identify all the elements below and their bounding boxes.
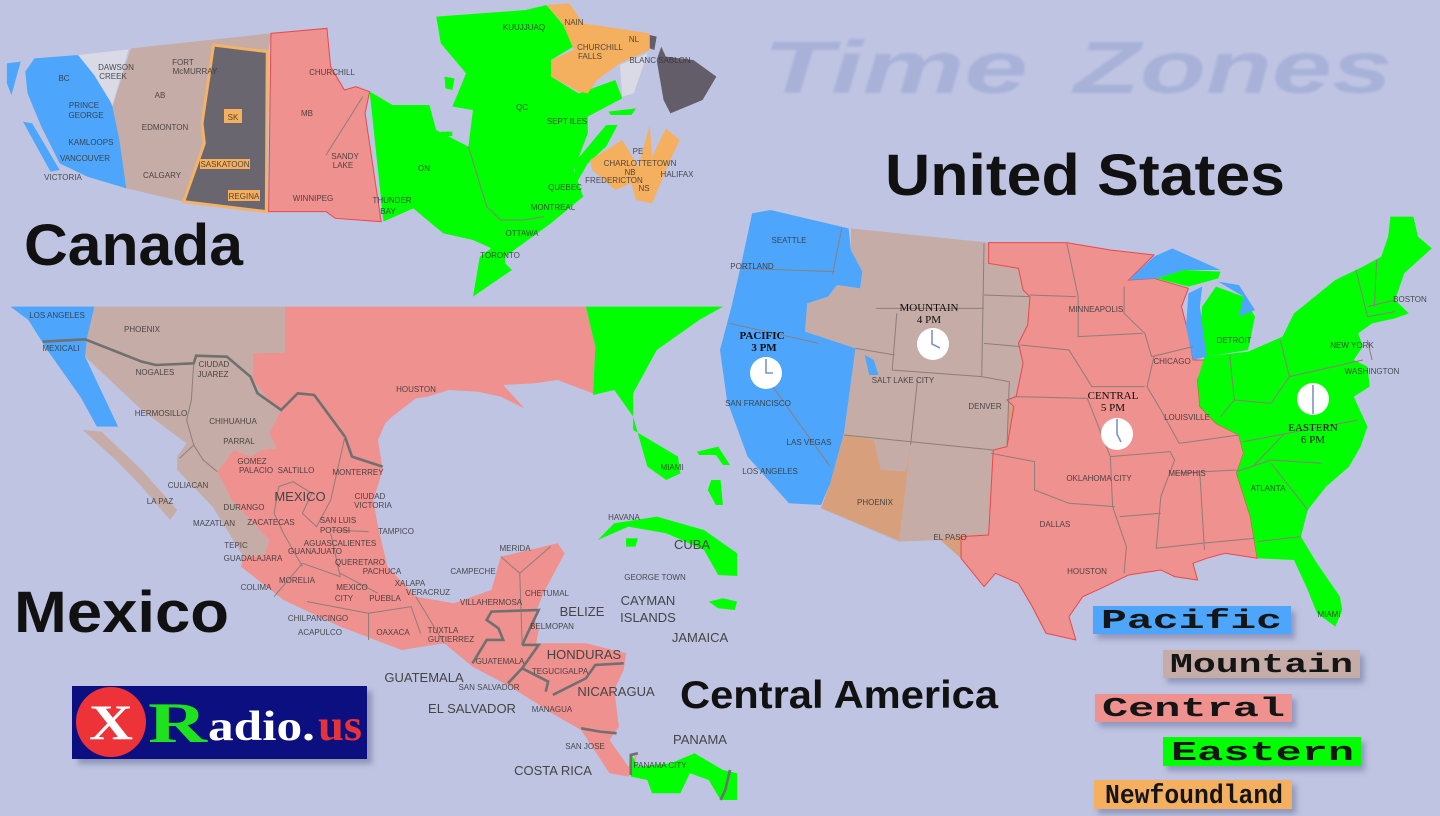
Canada city labels: PRINCE (69, 101, 99, 110)
Canada city labels: THUNDER (372, 196, 412, 205)
United States city and zone labels: LOUISVILLE (1164, 413, 1210, 422)
Mexico city labels: GUATEMALA (384, 670, 464, 685)
Canada city labels: LAKE (333, 161, 353, 170)
Canada city labels: SANDY (331, 152, 359, 161)
United States city and zone labels: SAN FRANCISCO (725, 399, 791, 408)
Mexico city labels: COLIMA (241, 583, 272, 592)
Mexico city labels: MEXICALI (42, 344, 80, 353)
logo: XRadio.us: adio. (208, 704, 315, 750)
Canada city labels: REGINA (229, 192, 260, 201)
Mexico city labels: CAYMAN (621, 593, 675, 608)
Canada city labels: CHURCHILL (577, 43, 623, 52)
Mexico city labels: MEXICO (336, 583, 368, 592)
Mexico city labels: AGUASCALIENTES (304, 539, 376, 548)
Mexico city labels: SAN LUIS (320, 516, 356, 525)
United States city and zone labels: BOSTON (1393, 295, 1427, 304)
United States city and zone labels: MOUNTAIN (899, 302, 959, 314)
Mexico city labels: GUATEMALA (476, 657, 525, 666)
icon: Eastern clock 6 PM (1297, 383, 1329, 415)
Mexico city labels: GUANAJUATO (288, 547, 342, 556)
Mexico city labels: PHOENIX (124, 325, 161, 334)
Mexico city labels: TEPIC (224, 541, 248, 550)
Mexico city labels: SALTILLO (278, 466, 314, 475)
Mexico city labels: CHILPANCINGO (288, 614, 348, 623)
Mexico city labels: VICTORIA (354, 501, 392, 510)
icon: Mountain clock 4 PM (917, 328, 949, 360)
Canada city labels: EDMONTON (142, 123, 188, 132)
Mexico city labels: ACAPULCO (298, 628, 342, 637)
Mexico city labels: JAMAICA (672, 630, 728, 645)
Canada city labels: KAMLOOPS (69, 138, 113, 147)
Mexico city labels: XALAPA (395, 579, 426, 588)
Canada city labels (44, 18, 694, 260)
Mexico city labels: POTOSI (320, 526, 350, 535)
United States city and zone labels: CHICAGO (1153, 357, 1191, 366)
United States city and zone labels: PORTLAND (730, 262, 774, 271)
panel: Canada map (7, 3, 716, 297)
Mexico city labels: MONTERREY (332, 468, 384, 477)
Canada city labels: FORT (172, 58, 194, 67)
Mexico city labels: MEXICO (274, 489, 326, 504)
United States time zone regions (720, 210, 1432, 640)
Canada city labels: BLANC SABLON (629, 56, 691, 65)
Mexico city labels: HAVANA (608, 513, 641, 522)
Canada city labels: HALIFAX (661, 170, 694, 179)
Mexico city labels: CHETUMAL (525, 589, 570, 598)
legend item: Pacific (1093, 606, 1295, 639)
Mexico city labels: JUAREZ (197, 370, 229, 379)
legend item: Eastern: Eastern (1171, 739, 1354, 769)
Mexico city labels: TAMPICO (378, 527, 414, 536)
Mexico city labels: PACHUCA (363, 567, 402, 576)
Canada city labels: TORONTO (480, 251, 520, 260)
logo: XRadio.us: R (148, 692, 208, 755)
Canada city labels: WINNIPEG (293, 194, 333, 203)
Mexico city labels: LOS ANGELES (29, 311, 85, 320)
Mexico city labels: CULIACAN (168, 481, 208, 490)
Canada city labels: KUUJJUAQ (503, 23, 545, 32)
United States city and zone labels: MIAMI (1317, 610, 1341, 619)
Mexico city labels: SAN JOSE (565, 742, 605, 751)
heading: Canada: Canada (24, 213, 244, 278)
Canada city labels: OTTAWA (505, 229, 539, 238)
Canada city labels: FREDERICTON (585, 176, 643, 185)
Mexico city labels: DURANGO (224, 503, 264, 512)
Canada city labels: PE (633, 147, 643, 156)
Mexico city labels: HOUSTON (396, 385, 436, 394)
United States city and zone labels: MINNEAPOLIS (1069, 305, 1123, 314)
Canada city labels: BAY (380, 207, 396, 216)
Canada city labels: CHURCHILL (309, 68, 355, 77)
United States city and zone labels (725, 236, 1427, 619)
Canada city labels: GEORGE (68, 111, 104, 120)
United States city and zone labels: DALLAS (1040, 520, 1070, 529)
United States city and zone labels: LAS VEGAS (787, 438, 831, 447)
Mexico city labels: BELIZE (560, 604, 605, 619)
icon: Central clock 5 PM (1101, 418, 1133, 450)
legend: time zone colours (1093, 606, 1365, 814)
Mexico city labels: CIUDAD (199, 360, 230, 369)
legend item: Mountain: Mountain (1170, 651, 1353, 681)
Mexico city labels: PUEBLA (369, 594, 401, 603)
legend item: Pacific: Pacific (1101, 607, 1282, 637)
heading: United States: United States (885, 143, 1285, 208)
Mexico city labels: COSTA RICA (514, 763, 592, 778)
logo: XRadio.us (72, 686, 372, 764)
United States city and zone labels: EASTERN (1288, 422, 1338, 434)
Mexico city labels (29, 311, 728, 778)
Mexico city labels: SAN SALVADOR (458, 683, 520, 692)
Mexico city labels: EL SALVADOR (428, 701, 516, 716)
legend item: Central (1095, 694, 1296, 727)
panel: United States map (720, 210, 1432, 640)
Mexico city labels: PALACIO (239, 466, 273, 475)
Canada city labels: FALLS (578, 52, 602, 61)
Mexico city labels: VILLAHERMOSA (460, 598, 523, 607)
Canada city labels: SEPT ILES (547, 117, 587, 126)
Mexico city labels: PANAMA (673, 732, 727, 747)
Canada city labels: McMURRAY (173, 67, 218, 76)
United States city and zone labels: SEATTLE (772, 236, 806, 245)
Mexico and Central America regions (10, 307, 737, 800)
Canada city labels: QC (516, 103, 528, 112)
Mexico city labels: QUERETARO (335, 558, 385, 567)
Mexico city labels: NOGALES (136, 368, 174, 377)
United States city and zone labels: PHOENIX (857, 498, 894, 507)
United States city and zone labels: 4 PM (917, 314, 941, 326)
panel: Mexico and Central America map (10, 307, 737, 800)
Mexico city labels: MERIDA (499, 544, 531, 553)
Mexico city labels: TUXTLA (428, 626, 459, 635)
Mexico city labels: GOMEZ (237, 457, 267, 466)
Mexico city labels: MAZATLAN (193, 519, 235, 528)
United States city and zone labels: 5 PM (1101, 402, 1125, 414)
Canada city labels: ON (418, 164, 430, 173)
Mexico city labels: HERMOSILLO (135, 409, 187, 418)
Mexico city labels: CAMPECHE (450, 567, 496, 576)
title: Time Zones: Zones (1071, 26, 1392, 109)
United States city and zone labels: MEMPHIS (1168, 469, 1206, 478)
Mexico city labels: ISLANDS (620, 610, 676, 625)
legend item: Mountain (1163, 650, 1364, 683)
United States city and zone labels: NEW YORK (1330, 341, 1374, 350)
United States city and zone labels: PACIFIC (739, 330, 785, 342)
Mexico city labels: CIUDAD (355, 492, 386, 501)
logo: XRadio.us: us (318, 701, 362, 750)
United States city and zone labels: DENVER (968, 402, 1002, 411)
United States city and zone labels: OKLAHOMA CITY (1066, 474, 1132, 483)
United States city and zone labels: ATLANTA (1251, 484, 1286, 493)
United States city and zone labels: DETROIT (1216, 336, 1252, 345)
title: Time Zones: Time (763, 26, 1028, 109)
Canada city labels: VANCOUVER (60, 154, 110, 163)
Mexico city labels: OAXACA (376, 628, 410, 637)
Canada city labels: NL (629, 35, 640, 44)
United States city and zone labels: 3 PM (751, 342, 777, 354)
Canada city labels: CREEK (99, 72, 127, 81)
Canada city labels: SASKATOON (200, 160, 250, 169)
United States city and zone labels: 6 PM (1301, 434, 1325, 446)
Canada city labels: NAIN (564, 18, 584, 27)
Canada city labels: CALGARY (143, 171, 182, 180)
Mexico city labels: GEORGE TOWN (624, 573, 686, 582)
Mexico city labels: MORELIA (279, 576, 316, 585)
Canada city labels: BC (58, 74, 70, 83)
icon: Pacific clock 3 PM (750, 357, 782, 389)
logo: XRadio.us: X (89, 694, 133, 750)
Mexico city labels: VERACRUZ (406, 588, 450, 597)
Mexico city labels: NICARAGUA (577, 684, 655, 699)
Canada city labels: CHARLOTTETOWN (604, 159, 677, 168)
legend item: Eastern (1163, 737, 1365, 771)
Mexico city labels: GUTIERREZ (428, 635, 474, 644)
Mexico city labels: PANAMA CITY (633, 761, 687, 770)
legend item: Newfoundland: Newfoundland (1105, 782, 1283, 812)
Mexico city labels: CUBA (674, 537, 710, 552)
Mexico city labels: BELMOPAN (530, 622, 574, 631)
heading: Central America: Central America (680, 674, 998, 717)
Canada city labels: QUEBEC (548, 183, 582, 192)
Mexico city labels: PARRAL (223, 437, 255, 446)
United States city and zone labels: SALT LAKE CITY (872, 376, 935, 385)
United States city and zone labels: LOS ANGELES (742, 467, 798, 476)
Mexico city labels: TEGUCIGALPA (532, 667, 589, 676)
United States city and zone labels: CENTRAL (1088, 390, 1139, 402)
Mexico city labels: CHIHUAHUA (209, 417, 257, 426)
Canada city labels: VICTORIA (44, 173, 82, 182)
Mexico city labels: ZACATECAS (247, 518, 295, 527)
title: Time Zones (763, 26, 1392, 109)
Canada city labels: AB (155, 91, 165, 100)
United States city and zone labels: EL PASO (933, 533, 967, 542)
Canada city labels: NB (624, 168, 636, 177)
Canada city labels: MB (301, 109, 313, 118)
Canada city labels: NS (638, 184, 650, 193)
Mexico city labels: CITY (335, 594, 354, 603)
Mexico city labels: HONDURAS (547, 647, 622, 662)
heading: Mexico: Mexico (14, 580, 229, 645)
Mexico city labels: GUADALAJARA (224, 554, 283, 563)
legend item: Central: Central (1102, 695, 1285, 725)
Canada city labels: DAWSON (98, 63, 134, 72)
Mexico city labels: LA PAZ (147, 497, 173, 506)
United States city and zone labels: HOUSTON (1067, 567, 1107, 576)
Canada time zone regions (7, 3, 716, 297)
Canada city labels: SK (228, 113, 239, 122)
Mexico city labels: MANAGUA (532, 705, 573, 714)
Mexico city labels: MIAMI (660, 463, 684, 472)
Canada city labels: MONTREAL (531, 203, 576, 212)
United States city and zone labels: WASHINGTON (1345, 367, 1400, 376)
